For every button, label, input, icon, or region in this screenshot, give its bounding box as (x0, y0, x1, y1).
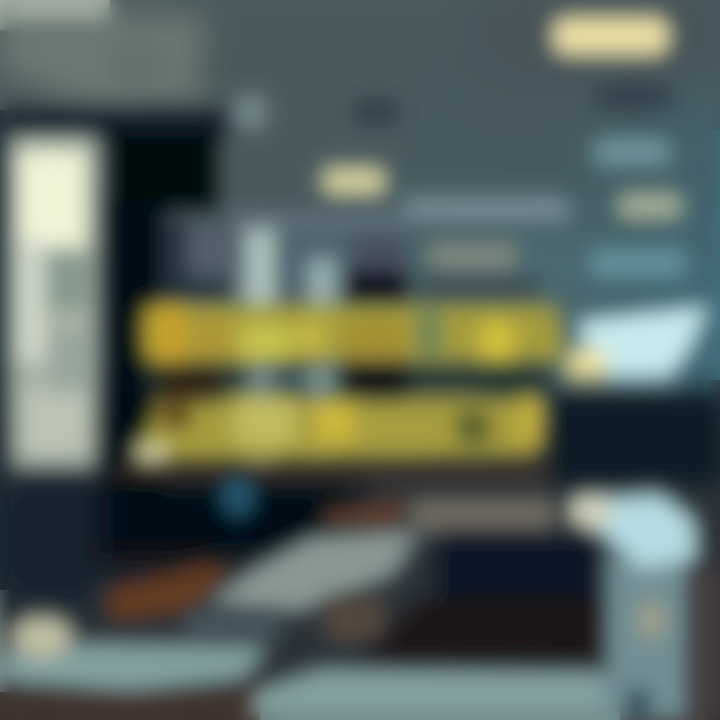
bright paper highlight (570, 492, 698, 570)
beige desk patch (410, 498, 555, 532)
top-left grey ceiling (0, 15, 218, 110)
right side blue-lit shapes (190, 138, 686, 300)
bright paper warm edge (568, 496, 612, 528)
pale columns behind title (160, 228, 538, 463)
ceiling dark spots (350, 83, 675, 126)
brown wedge by binder (325, 597, 385, 641)
light: centre (322, 167, 386, 195)
desk papers and objects (0, 492, 720, 720)
blue reflection below title (220, 475, 256, 519)
title band: line two (136, 398, 540, 462)
title colour patches (135, 306, 542, 468)
paper: left highlight (10, 615, 74, 659)
top-left bright light (0, 0, 110, 18)
soft ceiling tones (400, 0, 720, 300)
paper: lower left (0, 642, 270, 692)
right paper beige spot (638, 600, 666, 640)
paper: lower centre (250, 668, 625, 720)
title bands (136, 305, 566, 462)
right paper strip (606, 555, 688, 720)
brown desk streak: left (105, 562, 235, 622)
dark left wall (0, 108, 230, 500)
title band: gap (146, 364, 550, 394)
light: top right (552, 16, 670, 56)
right lit panel (550, 305, 720, 484)
lower left dark cabinet (0, 475, 360, 605)
bottom dark edge (0, 688, 280, 720)
title band: line one (142, 305, 566, 360)
title text: FINANCIAL (142, 301, 562, 364)
title text line two: AUTONOMY (135, 401, 535, 464)
right brown edge (695, 570, 720, 720)
grey bar (404, 198, 569, 220)
dark binder: lower (365, 600, 604, 660)
brown desk streak: top (320, 498, 410, 530)
paper shadow: centre left (185, 612, 280, 638)
paper stack: centre (205, 530, 420, 612)
ceiling lights (232, 16, 670, 195)
dark binder: upper (438, 536, 600, 616)
brown line under title (110, 466, 550, 478)
bottom right dark spot (628, 690, 648, 720)
light: upper middle (232, 94, 268, 130)
bright window panel (12, 136, 96, 472)
